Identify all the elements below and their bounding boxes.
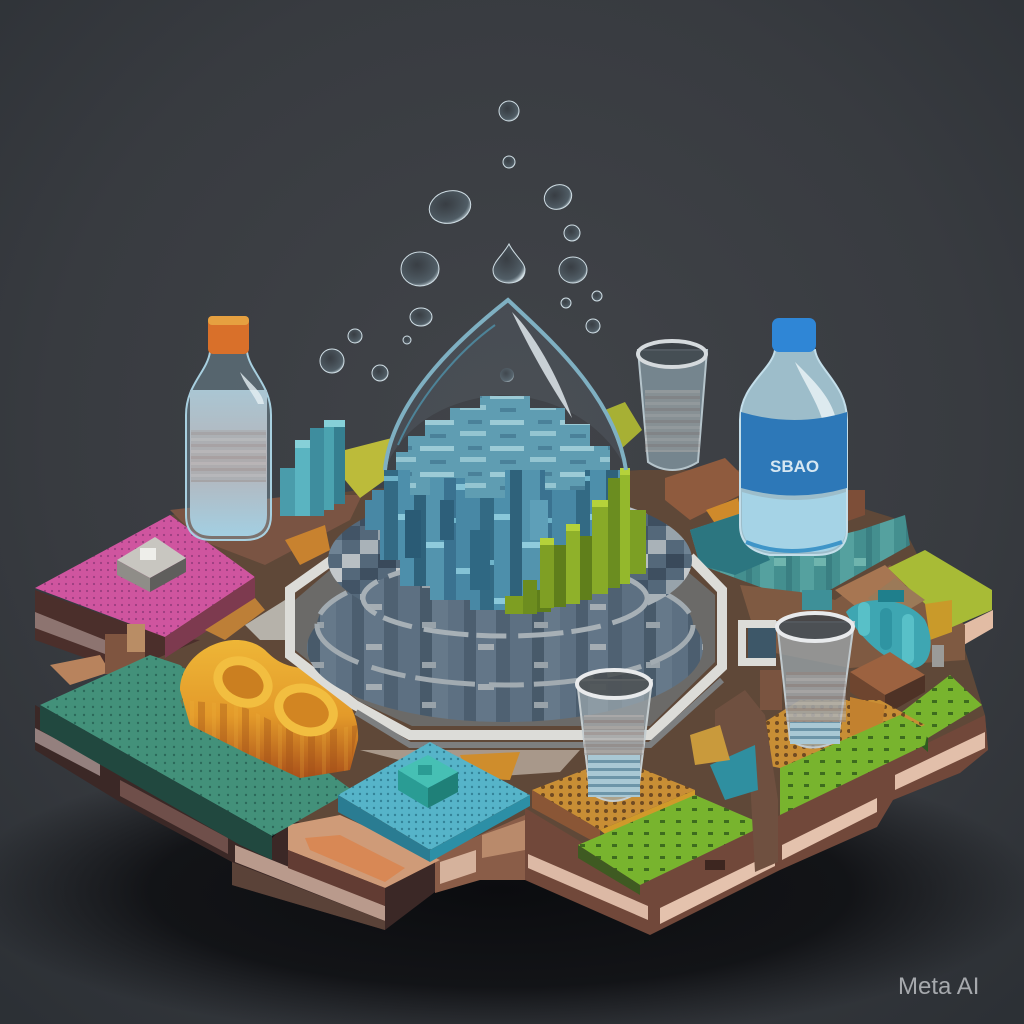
tile: brown slab	[835, 565, 905, 610]
tile: brown mixed right	[740, 565, 965, 668]
block: orange S shape	[180, 640, 358, 778]
left strata	[35, 705, 435, 930]
mound: lower gray tiers	[307, 490, 703, 722]
block: teal cube	[398, 755, 458, 808]
dome top water surface	[396, 396, 610, 498]
tile: orange small left	[285, 525, 330, 565]
tile: orange strip and brown post left	[50, 598, 265, 685]
mound: blue voxel dome	[365, 396, 630, 610]
tile: back brown left	[170, 495, 362, 565]
tile: brown back right	[665, 458, 742, 520]
bottle: left orange cap	[186, 316, 271, 540]
water droplets	[320, 101, 602, 381]
label stripes	[191, 430, 266, 482]
water	[742, 492, 846, 552]
tile: blue	[338, 742, 530, 862]
tile: lime bottom	[578, 795, 765, 895]
back tiles	[170, 402, 992, 668]
glass: back	[638, 341, 707, 470]
glass water drop	[385, 300, 626, 470]
label	[741, 412, 847, 496]
ring: white path around mound	[245, 553, 776, 780]
glass: right	[777, 613, 854, 748]
watermark: Meta AI	[898, 973, 979, 1000]
tile: orange-green right platform	[760, 697, 928, 815]
tile: green-teal	[40, 655, 352, 836]
tile: yellow-green right	[888, 550, 992, 628]
tile: brown right small	[845, 490, 865, 522]
tile: green-teal side	[40, 705, 272, 860]
tile: back yellow left	[345, 438, 392, 498]
tile: orange back right	[706, 498, 742, 525]
left upper strata	[35, 590, 200, 672]
dome dark shadow columns	[405, 510, 421, 558]
tile: pink	[35, 515, 255, 658]
cap	[208, 316, 249, 354]
shoulder highlight	[795, 362, 838, 430]
ground fill	[120, 470, 988, 905]
tile: yellow-green back right	[605, 402, 642, 450]
small drop inside	[500, 368, 514, 382]
tile: teal small	[802, 590, 832, 610]
highlight	[240, 372, 264, 404]
salmon front ledge	[288, 815, 440, 906]
tile: orange right	[925, 600, 952, 640]
coral: teal	[846, 578, 944, 668]
tile: orange-dotted center right	[532, 758, 695, 845]
right upper strata	[952, 610, 993, 650]
platform base	[35, 470, 993, 935]
tile: teal right	[690, 512, 910, 598]
tile: green right	[902, 675, 982, 752]
cap	[772, 318, 816, 352]
water	[190, 390, 267, 536]
block: teal columns left	[280, 420, 345, 516]
mound: green voxel columns	[505, 468, 646, 614]
right strata	[525, 715, 988, 935]
platform shadow	[0, 740, 1024, 1024]
block: gray cube	[117, 537, 186, 592]
middle strata	[435, 815, 525, 893]
glass: front	[577, 670, 652, 801]
bottle: right blue cap	[740, 318, 847, 555]
label text: SBAO	[770, 457, 819, 476]
block: brown rocks center right	[690, 670, 782, 872]
block: brown right	[850, 652, 925, 715]
